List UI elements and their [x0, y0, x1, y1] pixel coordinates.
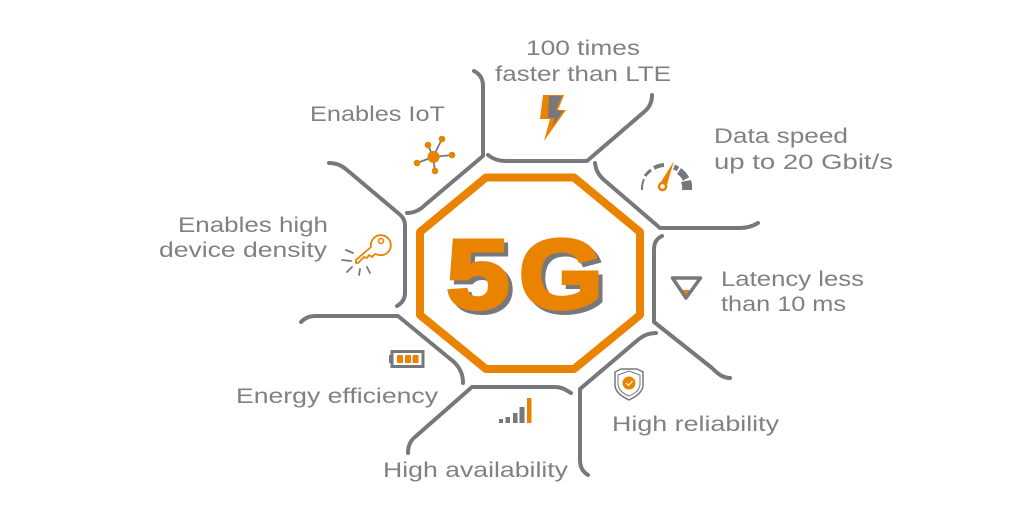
text: Data speed up to 20 Gbit/s: [714, 125, 893, 174]
segment: energy efficiency: [236, 316, 463, 408]
text: Enables high device density: Enables high: [178, 214, 328, 237]
text: 100 times faster than LTE: [495, 37, 671, 86]
text: Enables IoT: Enables IoT: [310, 103, 445, 126]
segment: faster than LTE: [488, 37, 671, 161]
text: High reliability: High reliability: [612, 413, 780, 436]
icon: speedometer gauge: [642, 161, 692, 190]
text: Enables high device density: device density: [159, 239, 328, 262]
text: Data speed up to 20 Gbit/s: up to 20 Gbit/s: [714, 151, 893, 174]
text: High availability: High availability: [383, 459, 569, 482]
bracket: energy: [301, 316, 463, 383]
central octagon badge: [420, 178, 640, 369]
icon: signal bars: [499, 398, 532, 423]
heading: 5G: [446, 219, 603, 329]
text: Latency less than 10 ms: than 10 ms: [721, 293, 846, 316]
bracket: data speed: [595, 163, 758, 228]
text: Latency less than 10 ms: Latency less: [721, 268, 864, 291]
icon: lightning bolt: [540, 95, 566, 141]
text: Data speed up to 20 Gbit/s: Data speed: [714, 125, 848, 148]
text: Latency less than 10 ms: [721, 268, 864, 316]
segment: device density: [159, 163, 405, 306]
segment: data speed: [595, 125, 893, 228]
heading: 5G shadow: [450, 223, 607, 333]
icon: funnel triangle: [672, 278, 700, 298]
text: Energy efficiency: Energy efficiency: [236, 385, 439, 408]
bracket: reliability: [580, 333, 656, 475]
icon: network hub: [414, 136, 455, 174]
bracket: speed: [488, 95, 652, 161]
segment: latency: [654, 236, 864, 378]
icon: key: [342, 235, 391, 275]
bracket: IoT: [407, 71, 483, 213]
segment: enables IoT: [310, 71, 483, 213]
segment: high availability: [383, 387, 571, 482]
bracket: availability: [408, 387, 571, 453]
heading: 5G shadow: G: [523, 223, 607, 333]
text: 100 times faster than LTE: faster than LTE: [495, 63, 671, 86]
heading: 5G: G: [519, 219, 603, 329]
bracket: latency: [654, 236, 730, 378]
text: Enables high device density: [159, 214, 328, 262]
heading: 5G shadow: 5: [450, 223, 514, 333]
segment: high reliability: [580, 333, 780, 475]
icon: battery: [389, 352, 423, 366]
bracket: device density: [329, 163, 405, 306]
heading: 5G: 5: [446, 219, 510, 329]
text: 100 times faster than LTE: 100 times: [526, 37, 640, 60]
icon: shield: [615, 369, 643, 400]
